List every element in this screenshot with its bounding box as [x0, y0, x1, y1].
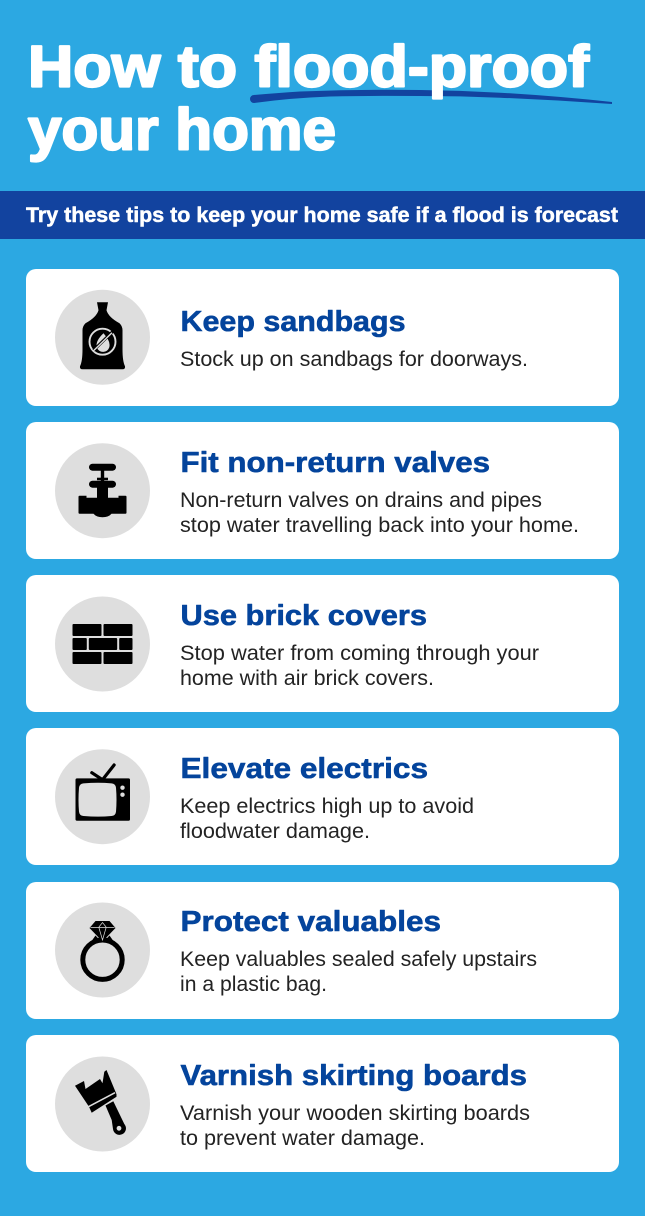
body text — [180, 795, 474, 843]
panel: elevate electrics — [26, 728, 619, 865]
body text: Non-return valves on drains and pipes — [180, 489, 542, 512]
icon: bricks — [55, 596, 150, 692]
body text: Stock up on sandbags for doorways. — [180, 348, 528, 371]
heading: Protect valuables — [180, 906, 441, 938]
heading: Elevate electrics — [180, 753, 428, 785]
title text: How to flood-proof — [28, 34, 590, 100]
icon: valve — [55, 443, 150, 538]
body text: Stop water from coming through your — [180, 642, 539, 665]
subtitle band: Try these tips to keep your home safe if a flood is forecast — [26, 204, 618, 227]
body text — [180, 642, 539, 690]
underline stroke — [250, 90, 612, 104]
title text: your home — [28, 98, 336, 162]
body text: Keep valuables sealed safely upstairs — [180, 948, 537, 971]
body text: Varnish your wooden skirting boards — [180, 1102, 530, 1125]
body text — [180, 489, 579, 537]
heading: Use brick covers — [180, 600, 427, 632]
body text: in a plastic bag. — [180, 973, 327, 996]
heading: Varnish skirting boards — [180, 1060, 527, 1092]
icon: paint brush — [55, 1056, 150, 1152]
subtitle band — [0, 191, 645, 239]
body text: Keep electrics high up to avoid — [180, 795, 474, 818]
panel: brick covers — [26, 575, 619, 712]
panel: varnish skirting boards — [26, 1035, 619, 1172]
panel: non-return valves — [26, 422, 619, 559]
panel: keep sandbags — [26, 269, 619, 406]
title text — [28, 34, 590, 162]
icon: diamond ring — [55, 902, 150, 998]
body text — [180, 1102, 530, 1150]
body text — [180, 948, 537, 996]
heading: Fit non-return valves — [180, 447, 490, 479]
body text: floodwater damage. — [180, 820, 370, 843]
body text: stop water travelling back into your home. — [180, 514, 579, 537]
body text: home with air brick covers. — [180, 667, 434, 690]
panel: protect valuables — [26, 882, 619, 1019]
title — [28, 34, 612, 162]
heading: Keep sandbags — [180, 306, 406, 338]
body text: to prevent water damage. — [180, 1127, 425, 1150]
icon: sandbag — [55, 290, 150, 385]
icon: television — [55, 749, 150, 844]
